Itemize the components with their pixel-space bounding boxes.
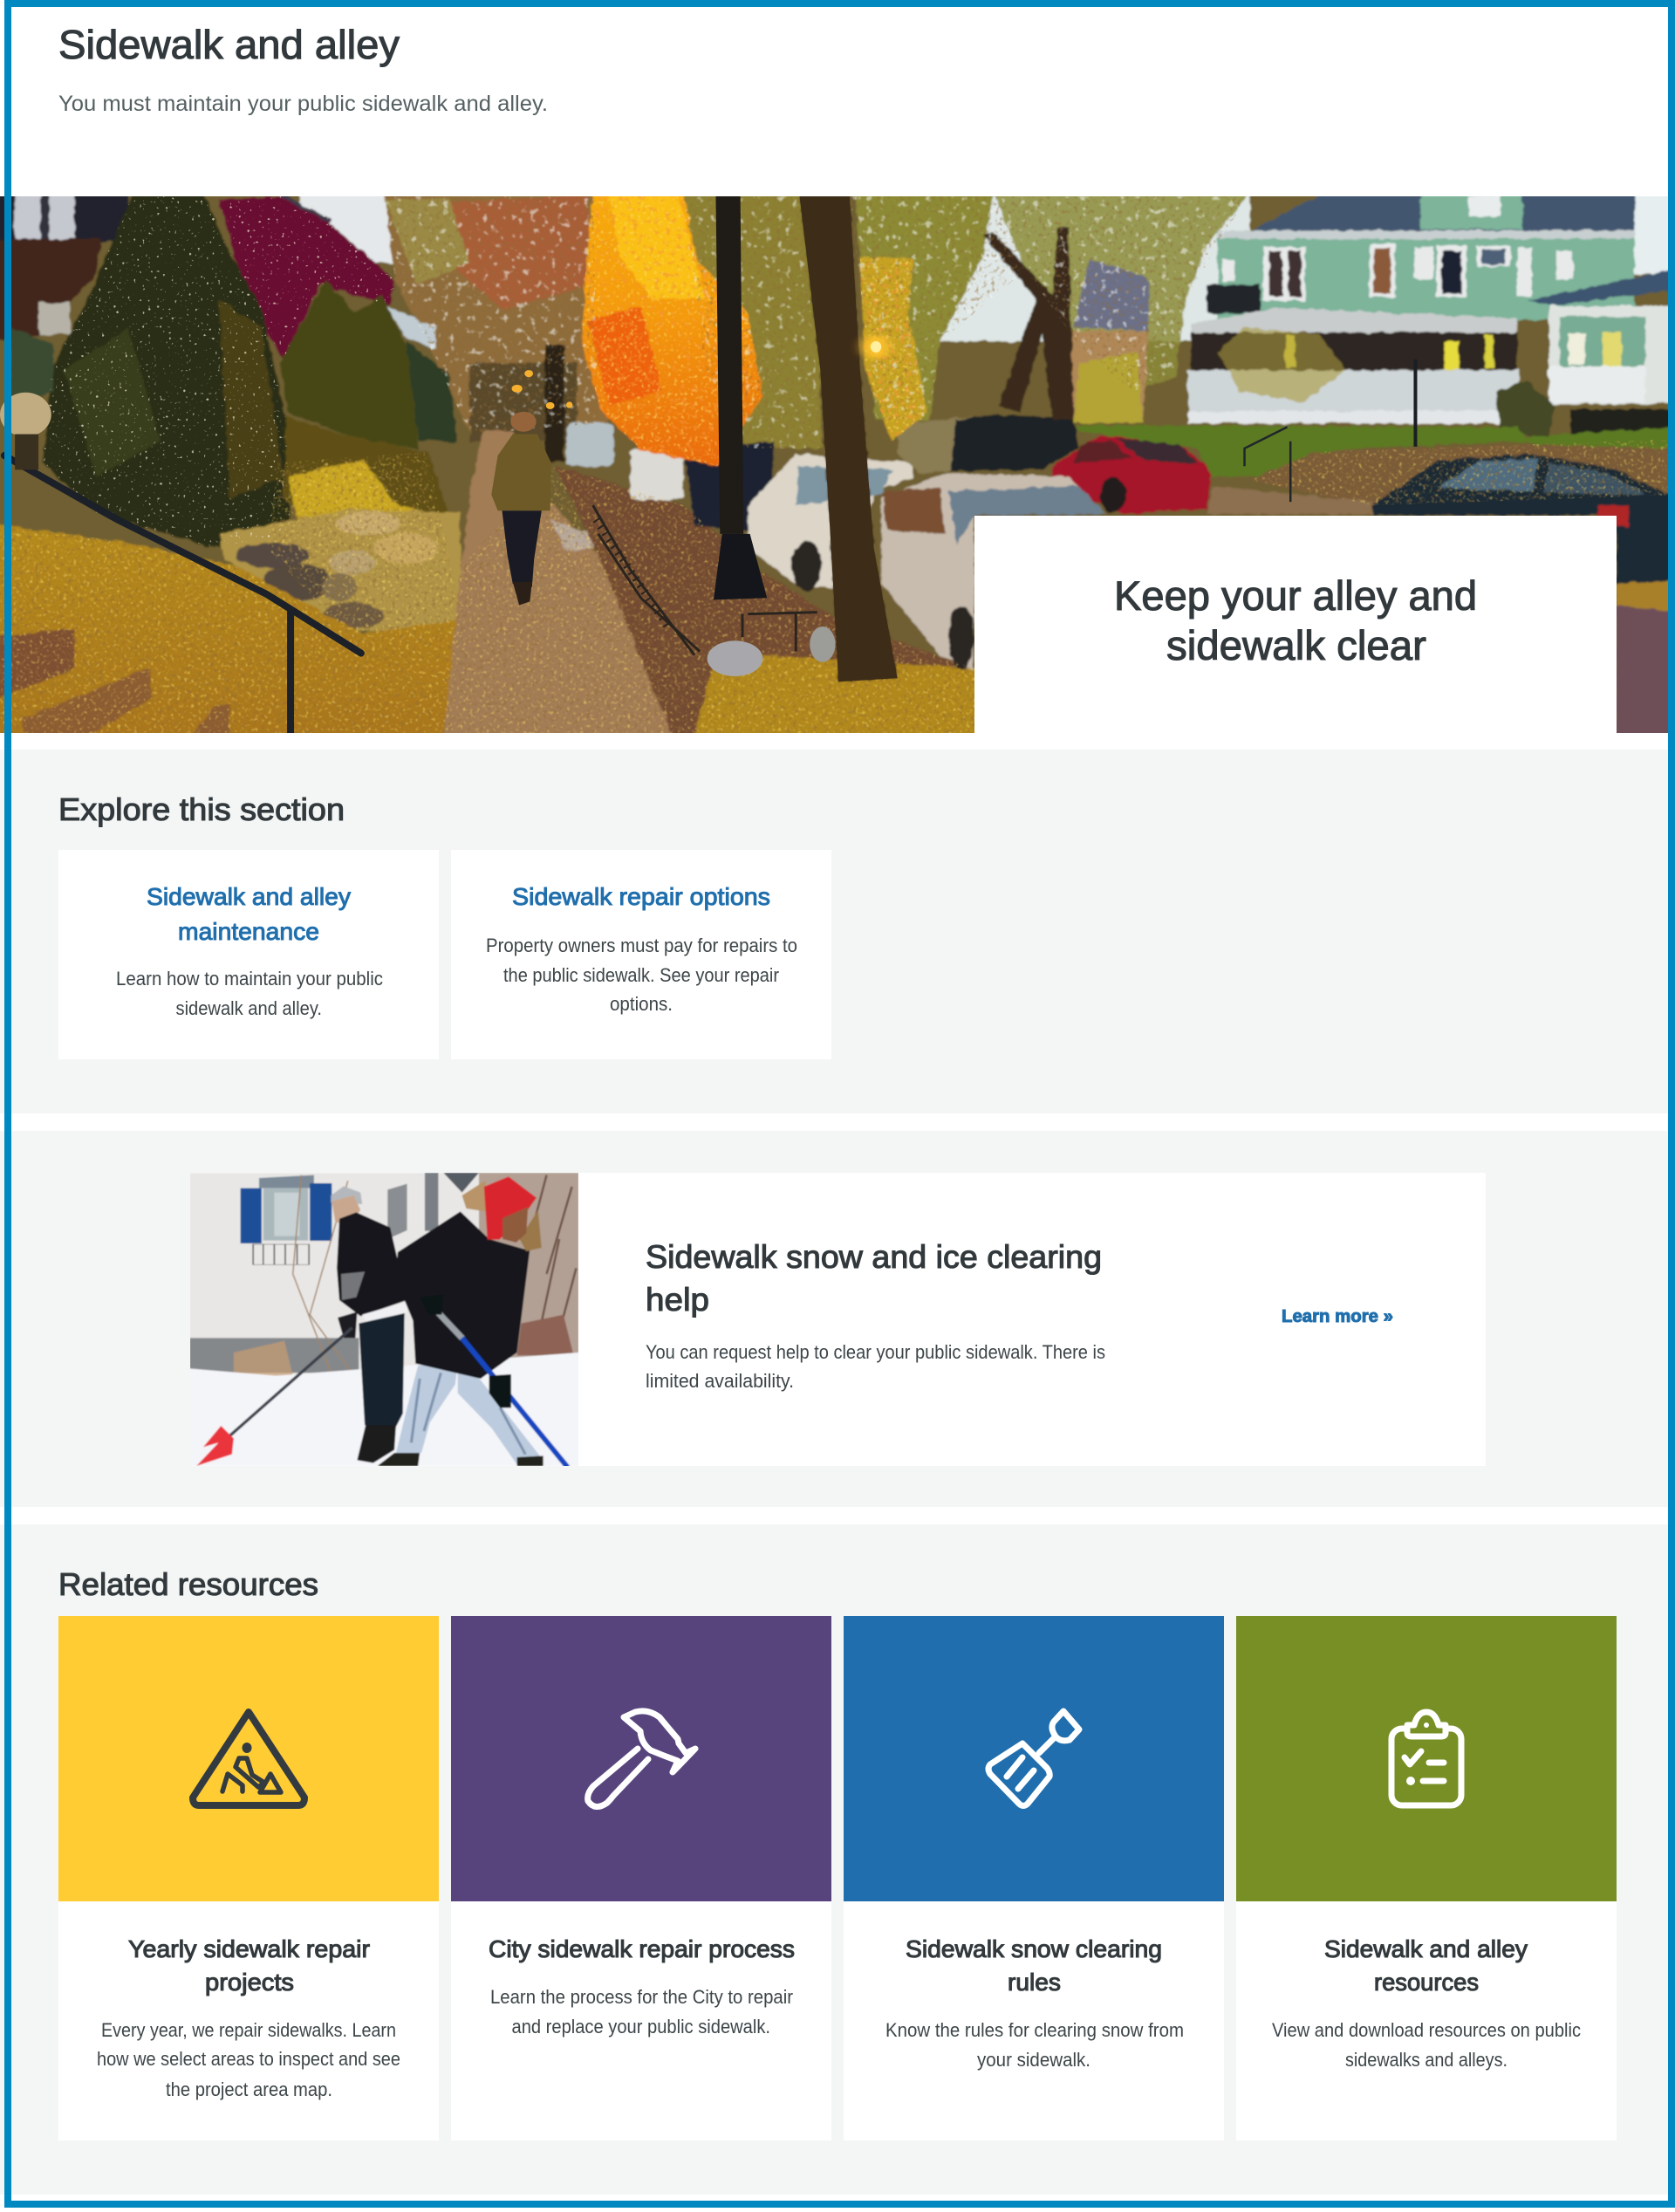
- card: sidewalk repair options: the public sidewalk. See your repair: [503, 964, 779, 986]
- card: city sidewalk repair process: and replace your public sidewalk.: [511, 2016, 770, 2037]
- card: city sidewalk repair process: [451, 1616, 831, 2140]
- card: sidewalk snow clearing rules: [844, 1616, 1224, 2140]
- texture: conifer highlights: [0, 196, 1668, 733]
- card: sidewalk snow clearing rules: Know the rules for clearing snow from: [885, 2019, 1184, 2041]
- texture: orange tree leaves: [0, 196, 1668, 733]
- rocks and planting: [219, 509, 465, 633]
- house windows: [1262, 247, 1305, 300]
- card: yearly sidewalk repair projects: Yearly sidewalk repair: [128, 1935, 370, 1962]
- card: sidewalk snow clearing rules: your sidewalk.: [977, 2049, 1090, 2071]
- road corner: [1617, 584, 1675, 736]
- learn more link: Learn more »: [1282, 1307, 1393, 1326]
- card: sidewalk repair options: Sidewalk repair options: [512, 883, 770, 910]
- snow shovel, red scoop: [230, 1328, 352, 1435]
- card: sidewalk repair options: options.: [610, 993, 673, 1015]
- street lamp glow: [863, 335, 889, 359]
- heading: explore this section: Explore this section: [58, 791, 345, 827]
- card: sidewalk and alley resources: Sidewalk and alley: [1324, 1935, 1528, 1962]
- white car: [748, 454, 914, 591]
- card: city sidewalk repair process: Learn the process for the City to repair: [490, 1986, 793, 2008]
- hero caption text: [1114, 572, 1477, 668]
- panel: related resources: [0, 1524, 1668, 2195]
- streetlamp on lawn: [1413, 360, 1417, 447]
- porch: [1191, 308, 1517, 336]
- texture: leaves on the ground: [0, 196, 1668, 733]
- hedge and yellow bushes: [283, 416, 448, 524]
- railing: [4, 455, 361, 654]
- card: sidewalk and alley resources: sidewalks and alleys.: [1345, 2049, 1508, 2071]
- silver car: [881, 473, 1105, 671]
- card: sidewalk and alley resources: View and download resources on public: [1272, 2019, 1581, 2041]
- promo text: [646, 1341, 1105, 1392]
- card: city sidewalk repair process: City sidewalk repair process: [489, 1935, 795, 1962]
- green house roof and body: [1253, 196, 1637, 232]
- card: yearly sidewalk repair projects: how we select areas to inspect and see: [97, 2048, 400, 2070]
- orange tree: [582, 192, 762, 466]
- photo: two people shoveling snow: [189, 1173, 578, 1468]
- hero caption text: sidewalk clear: [1166, 622, 1426, 668]
- promo card: [189, 1173, 1486, 1468]
- card: sidewalk and alley maintenance: sidewalk and alley.: [176, 997, 322, 1019]
- walking woman: [510, 412, 537, 432]
- page header: [58, 22, 548, 116]
- card: sidewalk and alley maintenance: Learn how to maintain your public: [116, 968, 383, 990]
- icon: road work sign: [193, 1712, 304, 1805]
- promo heading: Sidewalk snow and ice clearing: [646, 1239, 1102, 1275]
- mid background trees: [385, 192, 609, 435]
- right house: [1528, 269, 1675, 306]
- card: sidewalk snow clearing rules: rules: [1008, 1969, 1061, 1996]
- lawn: [1077, 425, 1528, 477]
- man in black: [331, 1186, 362, 1204]
- big conifer: [43, 192, 291, 548]
- panel: explore this section: [0, 750, 1668, 1113]
- street-side ground: [556, 466, 977, 736]
- stair planters: [0, 628, 75, 702]
- second conifer: [280, 279, 419, 449]
- small trunks: [983, 228, 1074, 420]
- distant street lights: [512, 370, 572, 409]
- card: yearly sidewalk repair projects: the project area map.: [166, 2078, 332, 2100]
- card: sidewalk and alley resources: [1236, 1616, 1617, 2140]
- card: yearly sidewalk repair projects: projects: [205, 1969, 294, 1996]
- card: yearly sidewalk repair projects: Every year, we repair sidewalks. Learn: [101, 2019, 396, 2041]
- large tree trunk: [799, 192, 898, 681]
- card: yearly sidewalk repair projects: [58, 1616, 439, 2140]
- snow shovel, blue handle: [434, 1307, 462, 1338]
- card: sidewalk and alley resources: resources: [1374, 1969, 1479, 1996]
- low iron fence: [593, 505, 817, 655]
- sky patches: [297, 196, 394, 266]
- man in red hood jacket: [396, 1211, 530, 1379]
- yellow leaves on trunk: [860, 256, 927, 442]
- card: sidewalk and alley maintenance: [58, 850, 439, 1059]
- icon: clipboard checklist: [1391, 1712, 1461, 1805]
- promo heading: [646, 1239, 1102, 1318]
- promo text: You can request help to clear your public sidewalk. There is: [646, 1341, 1105, 1363]
- card: sidewalk snow clearing rules: Sidewalk snow clearing: [906, 1935, 1162, 1962]
- round stone: [708, 640, 762, 676]
- title: Sidewalk and alley: [58, 22, 400, 67]
- left ground leaves: [0, 524, 470, 736]
- icon: snow shovel: [988, 1711, 1079, 1806]
- redraw of trunk over texture: [799, 192, 898, 681]
- texture: tree canopies: [0, 196, 1668, 733]
- left house: [0, 192, 128, 242]
- tan car and suv: [898, 416, 977, 473]
- hero caption card: [974, 516, 1617, 733]
- card: sidewalk and alley maintenance: Sidewalk and alley: [147, 883, 351, 910]
- card: sidewalk repair options: [451, 850, 831, 1059]
- sidewalk: [443, 430, 684, 736]
- icon: hammer: [588, 1711, 695, 1807]
- far street: [470, 363, 577, 442]
- promo heading: help: [646, 1282, 709, 1318]
- card: sidewalk repair options: Property owners must pay for repairs to: [486, 935, 797, 956]
- heading: related resources: Related resources: [58, 1566, 318, 1602]
- light jeans: [396, 1363, 458, 1453]
- dark blue car: [1372, 454, 1675, 584]
- hero caption text: Keep your alley and: [1114, 572, 1477, 619]
- hero photo: autumn street with sidewalk: [0, 192, 1675, 736]
- red car: [1052, 436, 1213, 514]
- panel: snow and ice help: [0, 1131, 1668, 1507]
- subtitle: You must maintain your public sidewalk and alley.: [58, 92, 548, 116]
- maroon tree: [219, 196, 395, 360]
- far cars: [566, 423, 614, 466]
- card: sidewalk and alley maintenance: maintenance: [178, 918, 319, 945]
- promo text: limited availability.: [646, 1370, 794, 1392]
- lamp post: [715, 192, 743, 534]
